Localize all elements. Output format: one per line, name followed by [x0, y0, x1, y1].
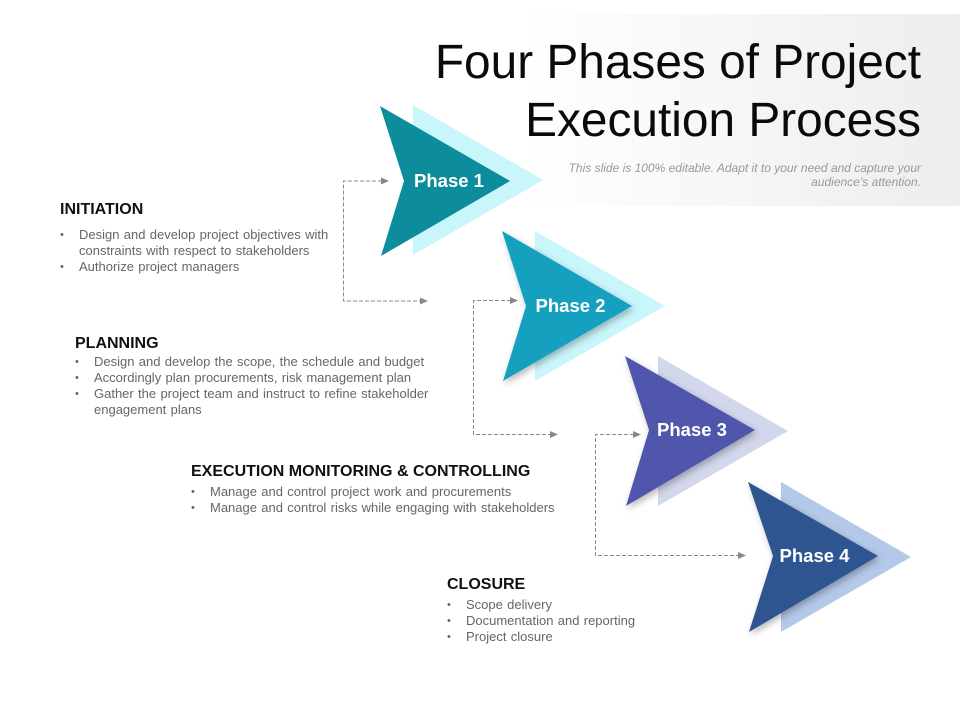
heading: execution: EXECUTION MONITORING & CONTROLLING [191, 463, 530, 480]
text: initiation bullets: Authorize project managers [79, 259, 239, 274]
heading: closure: CLOSURE [447, 576, 525, 593]
phase 3 arrow: Phase 3 [657, 419, 727, 440]
connector arrowheads [381, 178, 746, 559]
text: closure bullets: Scope delivery [466, 597, 552, 612]
connector: planning [474, 300, 551, 434]
subtitle: This slide is 100% editable. Adapt it to your need and capture your [569, 161, 921, 175]
text: planning bullets: Design and develop the scope, the schedule and budget [94, 354, 424, 369]
heading: initiation: INITIATION [60, 201, 143, 218]
heading: planning: PLANNING [75, 334, 159, 352]
phase 1 arrow [380, 105, 543, 256]
title [435, 36, 921, 146]
text: execution bullets: Manage and control project work and procurements [210, 484, 511, 499]
connector: initiation [344, 181, 422, 301]
text: closure bullets: Project closure [466, 629, 553, 644]
text: initiation bullets: constraints with respect to stakeholders [79, 243, 309, 258]
title: Four Phases of Project [435, 36, 921, 89]
text: planning bullets [76, 354, 428, 417]
text: closure bullets: Documentation and reporting [466, 613, 635, 628]
phase 2 arrow: Phase 2 [536, 295, 605, 316]
text: planning bullets: engagement plans [94, 402, 202, 417]
connector: execution [596, 434, 739, 556]
phase 4 arrow [748, 482, 911, 632]
text: initiation bullets: Design and develop project objectives with [79, 227, 328, 242]
phase 2 arrow [502, 231, 665, 381]
phase 4 arrow: Phase 4 [780, 545, 850, 566]
subtitle: audience’s attention. [811, 175, 921, 189]
text: execution bullets: Manage and control risks while engaging with stakeholders [210, 500, 555, 515]
subtitle [569, 161, 922, 189]
text: initiation bullets [60, 227, 328, 274]
text: closure bullets [448, 597, 635, 644]
text: planning bullets: Gather the project team and instruct to refine stakeholder [94, 386, 428, 401]
text: execution bullets [192, 484, 555, 515]
title: Execution Process [525, 94, 921, 146]
phase 1 arrow: Phase 1 [414, 170, 484, 191]
title banner background [522, 14, 960, 206]
phase 3 arrow [625, 356, 788, 506]
text: planning bullets: Accordingly plan procurements, risk management plan [94, 370, 411, 385]
